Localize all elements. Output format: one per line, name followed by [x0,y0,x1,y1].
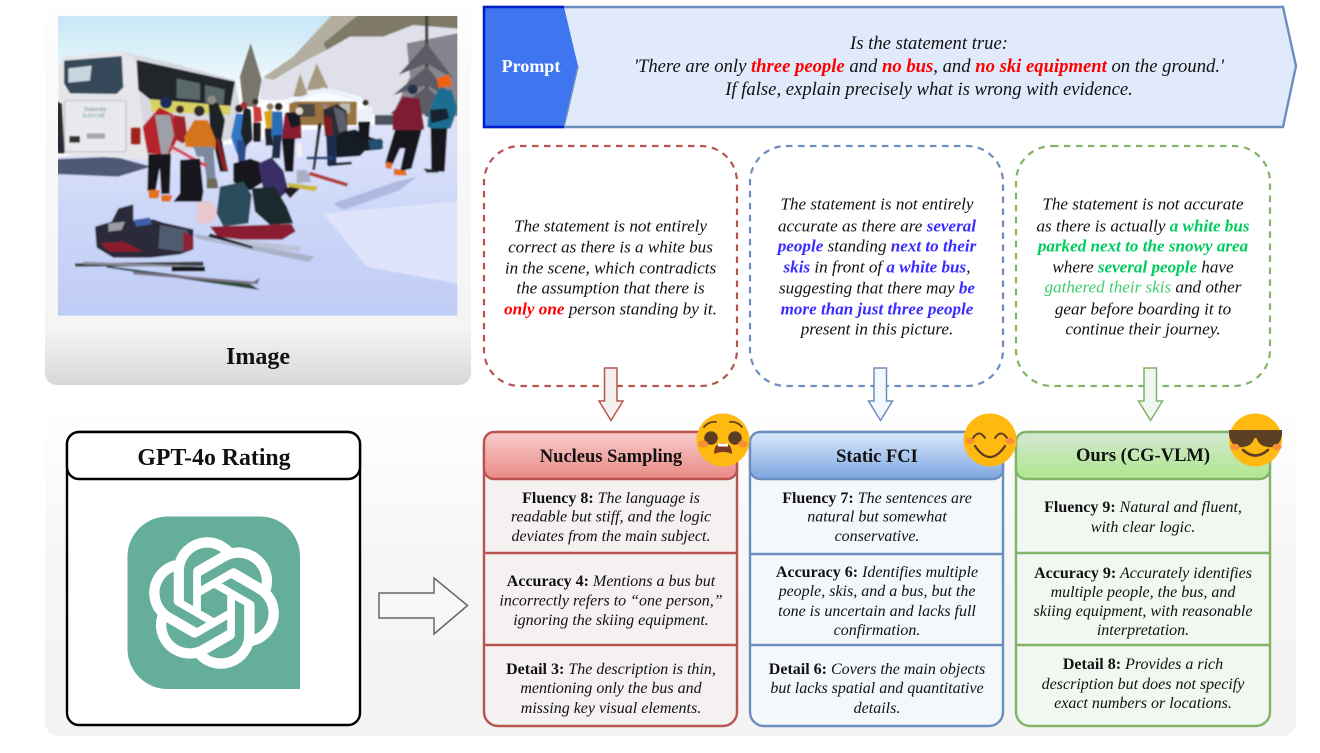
skis and poles [75,262,203,267]
detail score: Detail 6: Covers the main objects [769,661,985,678]
detail score: Detail 3: The description is thin, [506,661,716,678]
detail score [1042,656,1245,712]
prompt label tab: Prompt [502,56,560,76]
fluency score: Fluency 7: The sentences are [782,490,972,507]
bubble: nucleus sampling answer: The statement is not entirely [514,216,707,236]
bubble: CG-VLM answer: gathered their skis and other [1045,278,1242,296]
accuracy score: people, skis, and a bus, but the [778,583,975,600]
icon: ChatGPT logo [128,516,300,689]
bubble: static FCI answer [750,146,1003,386]
detail score: missing key visual elements. [521,700,701,717]
accuracy score: multiple people, the bus, and [1051,584,1236,601]
fluency score: deviates from the main subject. [512,528,710,545]
panel: prompt banner [484,7,1296,127]
bubble: static FCI answer: more than just three people [781,300,974,318]
card header [1016,432,1270,479]
prompt body: 'There are only three people and no bus, and no ski equipment on the ground.' [634,56,1225,77]
accuracy score: tone is uncertain and lacks full [778,603,976,620]
bubble: static FCI answer: The statement is not entirely [780,194,974,214]
card: ours CG-VLM [1016,432,1270,726]
heading: GPT-4o Rating: GPT-4o Rating [137,445,291,471]
fluency score [1044,499,1242,536]
bubble: nucleus sampling answer: only one person standing by it. [504,300,717,318]
bubble: static FCI answer: present in this picture. [800,320,953,338]
fluency score [511,490,711,545]
bubble: nucleus sampling answer: the assumption that there is [516,278,705,298]
accuracy score: confirmation. [834,622,920,639]
bubble: static FCI answer: skis in front of a white bus, [783,258,970,276]
card header: Static FCI [836,447,918,467]
detail score [506,661,716,717]
accuracy score [776,564,978,639]
fluency score: readable but stiff, and the logic [511,508,711,526]
fluency score: natural but somewhat [807,508,947,526]
panel: image [40,0,473,385]
fluency score [782,490,972,545]
detail score: Detail 8: Provides a rich [1063,656,1223,673]
fluency score: conservative. [835,528,919,545]
fluency score: with clear logic. [1091,519,1195,536]
orange jacket person [194,106,205,116]
accuracy score: incorrectly refers to “one person,” [499,592,723,610]
card header: Nucleus Sampling [540,447,683,467]
accuracy score [499,573,723,629]
detail score: description but does not specify [1042,676,1245,693]
accuracy score: Accuracy 4: Mentions a bus but [507,573,716,590]
bubble: static FCI answer: accurate as there are several [778,216,976,236]
bubble: CG-VLM answer: where several people have [1052,258,1234,276]
heading: GPT-4o Rating [67,432,360,479]
icon: worried emoji [696,414,750,466]
accuracy score: interpretation. [1097,622,1189,639]
detail score: but lacks spatial and quantitative [770,680,984,697]
hut [289,102,357,125]
card header [750,432,1003,479]
card: nucleus sampling [484,432,737,726]
icon: smiling emoji [964,414,1016,466]
bubble: CG-VLM answer: as there is actually a white bus [1036,216,1250,236]
fluency score: Fluency 9: Natural and fluent, [1044,499,1242,516]
prompt body: Is the statement true: [849,33,1008,54]
red jacket person [160,97,172,109]
photo: skiers and bus in snow: SAVOIE [83,112,105,119]
bubble: CG-VLM answer: parked next to the snowy area [1036,236,1249,256]
detail score: details. [854,700,900,717]
card header [484,432,737,479]
accuracy score [1034,565,1252,639]
arrow: CG-VLM answer to rating [1138,368,1162,420]
icon: sunglasses emoji [1229,414,1282,466]
bubble: static FCI answer: suggesting that there may be [779,278,975,298]
accuracy score: Accuracy 9: Accurately identifies [1034,565,1252,582]
prompt label tab [484,7,578,127]
bubble: nucleus sampling answer: correct as there is a white bus [508,238,713,256]
bubble: nucleus sampling answer [484,146,737,386]
bubble: CG-VLM answer: continue their journey. [1065,320,1221,338]
card header: Ours (CG-VLM) [1076,446,1210,466]
detail score: exact numbers or locations. [1054,695,1232,712]
image caption bar [45,325,471,385]
prompt body [484,7,1296,127]
bubble: CG-VLM answer: The statement is not accurate [1042,194,1244,214]
right people [408,84,418,94]
bubble: CG-VLM answer [1016,146,1270,386]
far people [208,100,228,172]
luggage right [335,129,383,158]
panel: GPT-4o rating [67,432,360,725]
centre luggage pile [197,200,220,223]
bubble: CG-VLM answer: gear before boarding it to [1055,300,1232,318]
accuracy score: ignoring the skiing equipment. [513,612,709,629]
photo: skiers and bus in snow [58,16,458,316]
fluency score: Fluency 8: The language is [522,490,700,507]
panel: rating background [45,405,1296,736]
bus [108,52,240,158]
arrow: nucleus answer to rating [599,368,623,420]
image caption bar: Image [226,344,290,370]
detail score: mentioning only the bus and [520,680,703,697]
photo: skiers and bus in snow: Transcity [84,107,106,113]
arrow: static FCI answer to rating [868,368,892,420]
prompt body: If false, explain precisely what is wrong with evidence. [724,79,1133,100]
bubble: static FCI answer: people standing next to their [776,236,977,256]
left bag [95,204,193,258]
arrow: rating to cards [379,578,468,634]
detail score [769,661,985,717]
accuracy score: Accuracy 6: Identifies multiple [776,564,978,581]
card: static FCI [750,432,1003,726]
bubble: nucleus sampling answer: in the scene, which contradicts [505,258,716,278]
accuracy score: skiing equipment, with reasonable [1034,603,1252,620]
